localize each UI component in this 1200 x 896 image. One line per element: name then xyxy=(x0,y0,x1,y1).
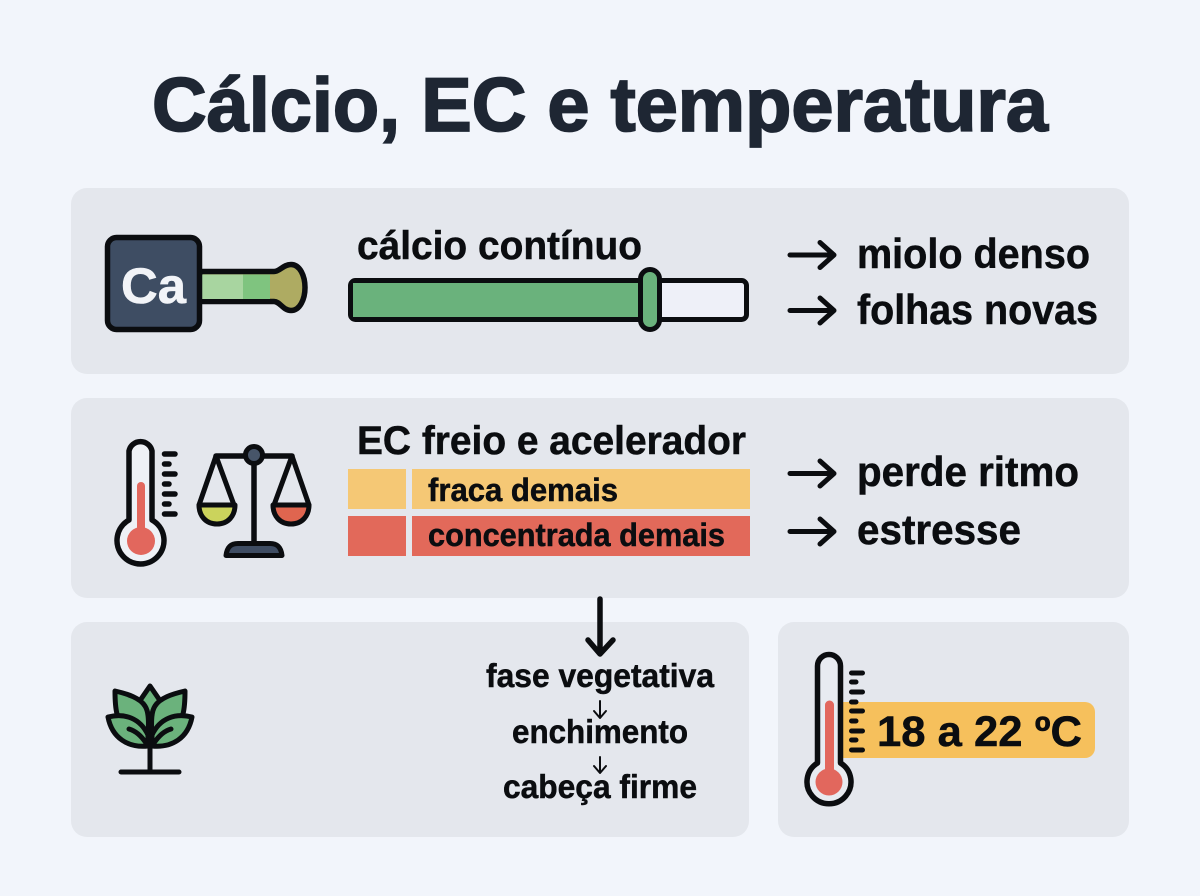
icon: thermometer xyxy=(807,654,862,804)
arrow xyxy=(790,519,834,544)
heading: EC brake and accelerator: EC freio e acelerador xyxy=(357,419,746,463)
progress bar xyxy=(350,270,746,330)
label: vegetative phase: fase vegetativa xyxy=(486,657,715,694)
bar: too concentrated: concentrada demais xyxy=(428,517,725,553)
label: loses pace: perde ritmo xyxy=(857,448,1079,495)
panel: EC xyxy=(71,398,1129,598)
panel: growth stages xyxy=(71,599,749,837)
arrow xyxy=(790,461,834,486)
label: filling: enchimento xyxy=(512,713,688,750)
label: firm head: cabeça firme xyxy=(503,768,697,805)
label: stress: estresse xyxy=(857,506,1021,553)
arrow xyxy=(790,242,834,268)
heading: continuous calcium: cálcio contínuo xyxy=(357,224,642,268)
bar: too weak xyxy=(348,469,750,509)
title: Cálcio, EC e temperatura xyxy=(152,63,1049,148)
arrow: down xyxy=(588,599,613,654)
bar: too weak: fraca demais xyxy=(428,472,618,508)
bar: too concentrated xyxy=(348,516,750,556)
arrow xyxy=(790,298,834,323)
icon: plant xyxy=(108,686,192,772)
icon: balance scale xyxy=(199,446,309,556)
icon: calcium tube: Ca xyxy=(121,258,187,314)
label: dense heart: miolo denso xyxy=(857,230,1090,277)
icon: thermometer xyxy=(117,442,175,564)
icon: calcium tube xyxy=(108,238,305,330)
temperature badge xyxy=(843,702,1095,758)
label: new leaves: folhas novas xyxy=(857,286,1098,333)
arrow: small down xyxy=(594,701,606,718)
temperature badge: 18 a 22 ºC xyxy=(877,708,1082,756)
arrow: small down xyxy=(594,757,606,773)
panel: calcium xyxy=(71,188,1129,374)
panel: temperature xyxy=(778,622,1129,837)
